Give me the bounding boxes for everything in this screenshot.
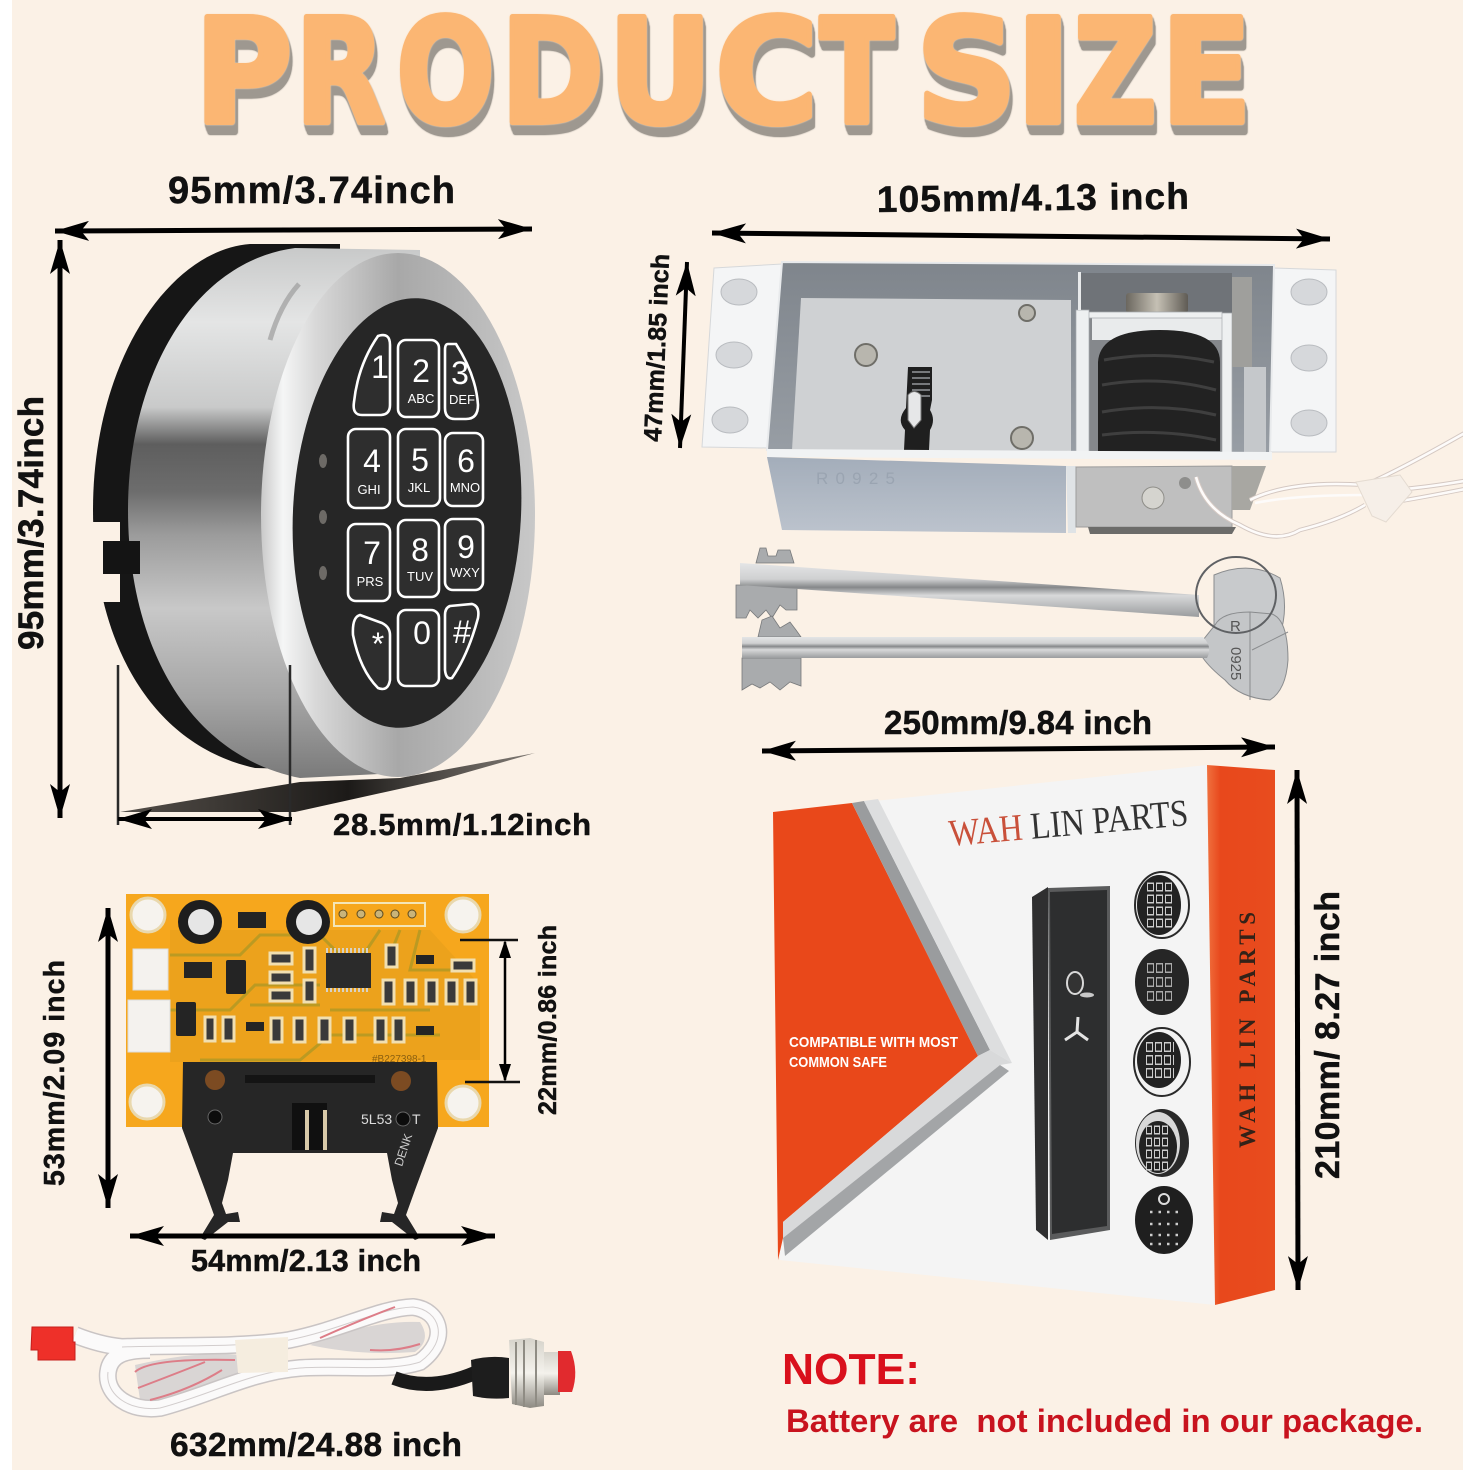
lock slot [901,367,933,450]
keypad labels: ABC [408,391,434,406]
mini lock three [1134,1028,1190,1096]
label: lock box height: 47mm/1.85 inch [639,253,675,442]
arrow: dial depth [118,817,292,821]
tray inner [767,262,1274,455]
coil cap [1092,318,1222,340]
mounting holes [130,898,480,1120]
box compatibility text [789,1034,958,1071]
arrow: dial width [55,229,532,231]
box spine text: WAH LIN PARTS [1235,912,1260,1148]
board [126,894,489,1127]
keypad labels: JKL [408,480,430,495]
button neck [544,1352,560,1395]
arrow: box height [1297,770,1298,1290]
panel: keys [736,548,1288,700]
label: keys length: 250mm/9.84 inch [884,704,1152,741]
panel: product box [773,765,1275,1305]
gun safe side [1032,887,1048,1240]
dial notch tab [103,541,140,574]
arrow: board height [106,908,110,1208]
board copper area [170,930,480,1062]
flange holes [712,279,1327,436]
coil highlights [1102,355,1216,440]
label: board width: 54mm/2.13 inch [191,1244,421,1278]
label: board hole spacing: 22mm/0.86 inch [534,925,562,1115]
ribbon connector [182,1062,438,1240]
keypad labels: TUV [407,569,433,584]
dial silver cylinder [128,248,420,778]
keypad labels: PRS [357,574,384,589]
box white front [773,765,1215,1305]
keypad labels: GHI [357,482,381,497]
box red panel [773,803,978,1260]
wire strand lines [108,1307,438,1409]
safe door panel [1050,890,1107,1234]
panel: button cable [31,1307,575,1409]
chevron dark lower [783,1065,1009,1256]
label: dial height: 95mm/3.74inch [12,396,51,650]
lower bracket [1066,466,1076,533]
wire red stripes [135,1307,420,1400]
title [195,0,1251,157]
key one bow [1214,568,1285,640]
ribbon connector: DENK [392,1132,415,1168]
keypad labels: 5 [411,442,429,478]
safe door frame [1048,886,1110,1240]
box spine [1207,765,1275,1305]
key two shaft [742,637,1209,658]
right side strip [1232,277,1252,367]
keypad labels: 1 [371,349,389,385]
keypad labels: 4 [363,443,381,479]
lock pin [908,392,921,428]
stamped code: R0925 [816,469,895,488]
keypad labels: 7 [363,535,381,571]
resistors [205,945,476,1042]
solenoid upper cavity [1081,273,1232,313]
solenoid bracket [1076,310,1232,453]
wire tape [235,1337,288,1373]
keypad labels: 0 [413,615,431,651]
dial black face [282,292,532,734]
thread grooves [516,1340,536,1407]
solenoid bolt [1126,293,1188,313]
lock wires [1196,430,1470,536]
keypad buttons [348,335,483,689]
box brand: WAH LIN PARTS [947,792,1190,855]
keypad labels: 8 [411,532,429,568]
key two bit teeth [742,616,801,690]
mini lock five [1135,1186,1193,1254]
keypad labels [357,349,480,662]
left mounting flange [702,264,782,448]
keypad labels: 9 [457,529,475,565]
dial cable notch [88,522,120,602]
push button body [471,1357,509,1399]
keypad labels: # [453,614,471,650]
mini lock four [1135,1109,1189,1177]
arrow: board width [130,1234,495,1238]
label: box height: 210mm/ 8.27 inch [1309,891,1347,1179]
keypad labels: DEF [449,392,475,407]
board traces [170,930,470,1060]
status lights [319,454,327,580]
arrow: keys length [762,747,1275,751]
key one bit teeth [736,548,797,618]
note heading: NOTE: [782,1345,920,1394]
keypad labels: WXY [450,565,480,580]
depth guide lines [118,665,290,825]
ribbon connector: 5L53 [361,1111,392,1127]
chevron light lower [783,1050,1012,1238]
right mounting flange [1268,268,1336,452]
arrow: dial height [58,240,62,818]
compartment side [1232,466,1266,510]
label: lock box width: 105mm/4.13 inch [877,176,1189,220]
transistors and diodes [176,912,434,1036]
key two bow [1203,612,1288,700]
dial shadow [120,753,535,812]
dial silver ring [261,253,535,777]
compartment base [1088,527,1236,534]
label: board height: 53mm/2.09 inch [39,960,71,1186]
slot ridges [912,372,930,396]
solenoid lower cavity [1085,318,1225,452]
wire tie [1356,475,1412,522]
box compatibility text: COMMON SAFE [789,1054,887,1071]
right side light strip [1244,367,1266,455]
lock wires shadow [1196,430,1470,536]
plate screws [855,305,1035,449]
compartment bolt [1142,477,1191,509]
front wall [767,457,1066,533]
frame divider [1078,272,1081,310]
safe badge [1080,992,1094,998]
button cap [558,1351,575,1392]
dial black base [93,244,340,770]
panel: circuit board [126,894,489,1240]
keypad labels: * [372,626,384,662]
wire loop [75,1307,438,1409]
wire loop shadow [75,1307,438,1409]
keypad labels: 2 [412,353,430,389]
button thread [509,1338,544,1408]
inner plate [792,298,1071,451]
safe handle [1065,1017,1088,1040]
arrow: board hole spacing [460,940,520,1082]
capacitors [178,900,330,944]
key bow text: 0925 [1227,647,1244,680]
microchip [326,948,371,992]
wiring compartment [1076,466,1232,527]
white connectors [128,949,170,1052]
solenoid coil [1098,330,1220,451]
pin header [334,903,425,926]
mini lock two [1135,949,1189,1015]
dial crease [270,284,299,340]
box compatibility text: COMPATIBLE WITH MOST [789,1034,958,1051]
ribbon connector: T [412,1111,421,1127]
label: cable length: 632mm/24.88 inch [170,1427,462,1464]
key ring [1196,557,1276,633]
bow panel lines [1250,612,1288,700]
front lip [767,449,1272,460]
board tiny code: #B227398-1 [372,1054,427,1065]
safe dial [1067,972,1083,994]
keypad labels: 6 [457,443,475,479]
wire loop gaps [135,1322,425,1400]
panel: keypad dial [88,244,535,825]
key one shaft [740,563,1199,617]
mini lock one [1135,872,1189,938]
arrow: lock box height [680,262,687,448]
red plug [31,1327,75,1360]
label: dial depth: 28.5mm/1.12inch [333,807,591,842]
black wire [394,1373,475,1384]
chevron light upper [864,799,1012,1063]
chevron dark upper [852,801,990,1056]
keypad labels: MNO [450,480,480,495]
keypad labels: 3 [451,355,469,391]
panel: lock box [702,262,1470,536]
arrow: lock box width [712,233,1330,239]
note text: Battery are not included in our package. [786,1403,1423,1439]
key bow letter: R [1230,618,1241,635]
label: dial width: 95mm/3.74inch [168,170,455,212]
